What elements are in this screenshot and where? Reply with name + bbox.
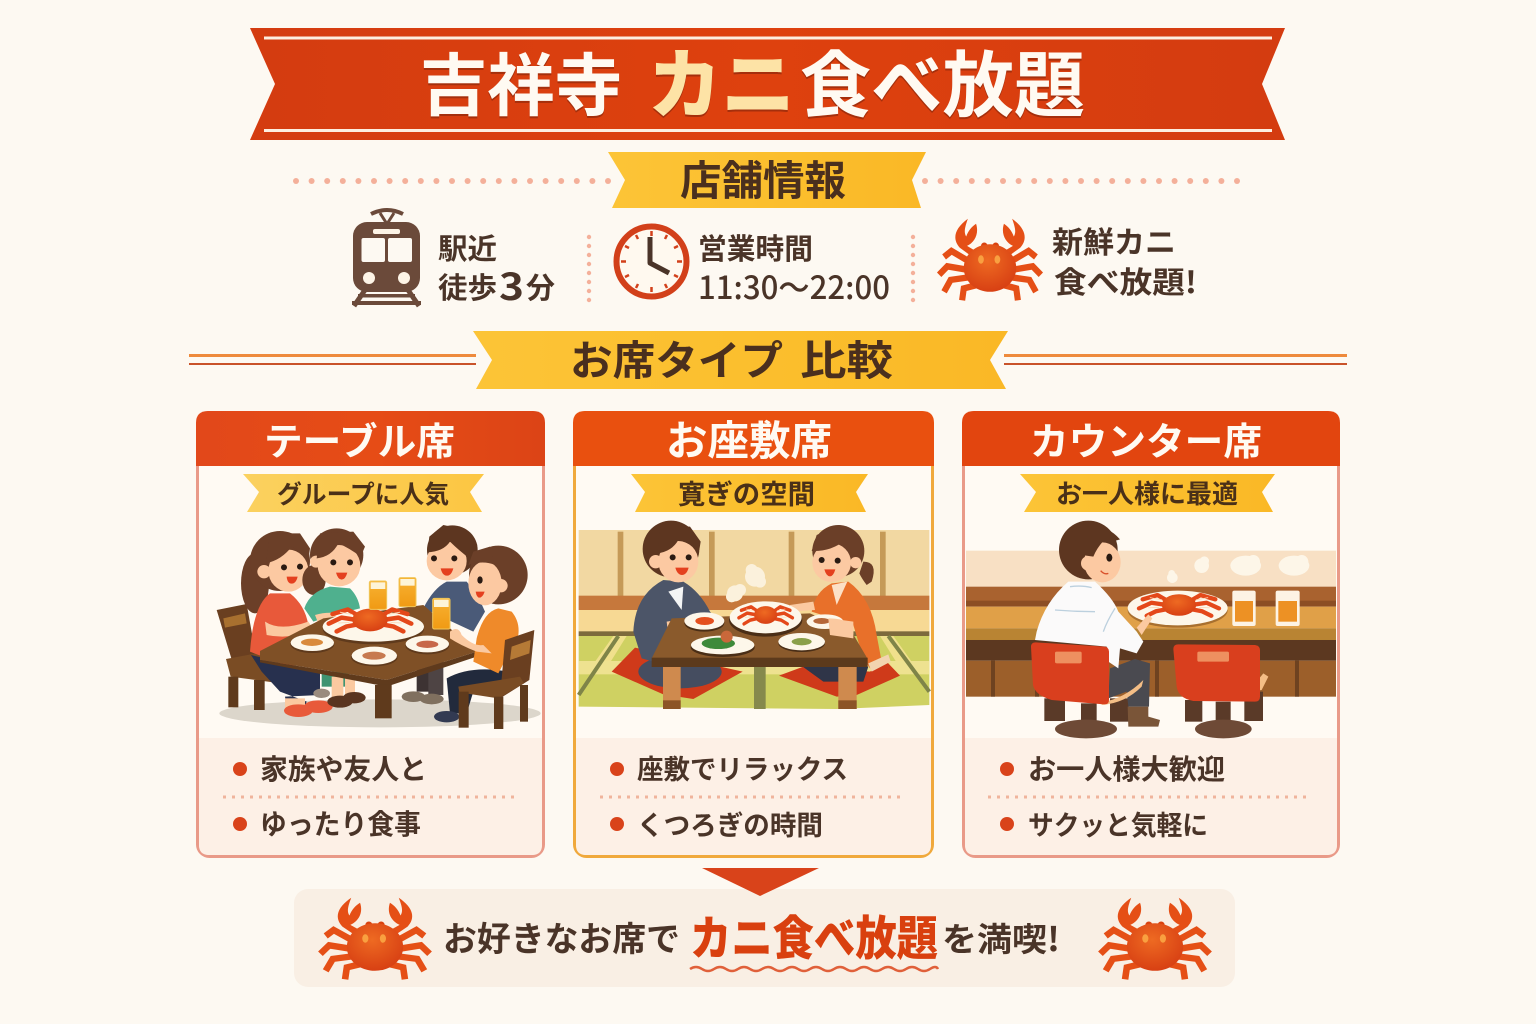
table <box>260 605 477 718</box>
panel: counter seats <box>962 411 1340 856</box>
sub ribbon <box>631 473 868 512</box>
sub ribbon: グループに人気 <box>277 475 449 511</box>
bullet list: サクッと気軽に <box>1028 804 1208 843</box>
card header: お座敷席 <box>666 407 832 467</box>
man in navy <box>402 525 485 704</box>
text: opening hours: 営業時間 <box>698 226 813 268</box>
text: station access: 駅近 <box>438 226 497 268</box>
pedestals <box>1044 692 1263 723</box>
text: station access: 徒歩 <box>438 265 497 307</box>
crab plate <box>1128 591 1228 635</box>
icon: right crab <box>1100 898 1210 979</box>
text: all you can eat crab <box>1052 218 1197 302</box>
bullet list: くつろぎの時間 <box>637 804 823 843</box>
sub ribbon: 寛ぎの空間 <box>678 473 815 512</box>
woman in orange kimono <box>790 525 891 682</box>
man from behind <box>1035 521 1160 727</box>
steam <box>1167 555 1309 583</box>
panel: zashiki seats <box>573 407 934 856</box>
beer glasses <box>1232 591 1300 626</box>
text: all you can eat crab: 新鮮カニ <box>1052 218 1176 262</box>
bullet list: ゆったり食事 <box>260 803 421 843</box>
stool right <box>1173 644 1268 702</box>
bullet list <box>223 748 516 843</box>
seat comparison heading ribbon <box>473 327 1008 389</box>
card header <box>196 411 545 466</box>
text: opening hours: 11:30〜22:00 <box>698 263 890 309</box>
callout text: お好きなお席で <box>443 912 680 961</box>
icon: left crab <box>320 898 430 979</box>
seat comparison heading ribbon: 比較 <box>800 327 893 387</box>
steam <box>726 564 766 602</box>
callout text: を満喫! <box>942 913 1060 961</box>
sub ribbon <box>243 474 484 512</box>
bullet list <box>988 748 1311 843</box>
store info heading ribbon <box>608 147 926 208</box>
icon: train <box>352 210 421 306</box>
right chair <box>458 630 534 729</box>
low table <box>652 601 868 709</box>
person in orange <box>434 546 528 722</box>
down arrow <box>702 868 819 896</box>
title banner: 食べ放題 <box>800 27 1085 132</box>
left cushion <box>612 648 743 699</box>
card header: テーブル席 <box>264 411 455 466</box>
illustration: group at table <box>217 525 541 729</box>
left chair <box>217 604 281 710</box>
text: station access: 3 <box>499 257 524 311</box>
card header <box>573 407 934 467</box>
woman in red <box>241 531 333 717</box>
icon: crab <box>939 219 1041 300</box>
card header: カウンター席 <box>1030 411 1262 466</box>
beer glasses <box>369 578 450 629</box>
store info heading ribbon: 店舗情報 <box>680 147 846 207</box>
bullet list <box>600 748 906 843</box>
icon: clock <box>616 226 686 296</box>
title banner: 吉祥寺 <box>420 31 622 130</box>
woman in teal <box>302 528 366 708</box>
bullet list: 座敷でリラックス <box>637 748 848 787</box>
sub ribbon <box>1020 474 1275 512</box>
text: station access: 分 <box>526 265 555 307</box>
divider <box>587 235 915 302</box>
sub ribbon: お一人様に最適 <box>1056 474 1238 511</box>
right cushion <box>779 662 900 697</box>
seat comparison heading ribbon: お席タイプ <box>570 327 783 387</box>
text: all you can eat crab: 食べ放題! <box>1054 258 1197 302</box>
callout text <box>443 900 1060 969</box>
man in dark kimono <box>633 521 722 688</box>
bullet list: 家族や友人と <box>260 748 427 788</box>
stool left <box>1031 642 1143 705</box>
text: opening hours <box>698 226 890 309</box>
text: station access <box>438 226 555 311</box>
bullet list: お一人様大歓迎 <box>1028 748 1225 788</box>
callout text: カニ食べ放題 <box>690 900 938 969</box>
store info dotted rule <box>293 178 1240 184</box>
wavy underline <box>690 967 938 971</box>
title banner <box>250 24 1285 140</box>
card header <box>962 411 1340 466</box>
panel: table seats <box>196 411 545 856</box>
illustration: counter <box>966 521 1336 738</box>
footer callout panel <box>294 889 1235 987</box>
title banner: カニ <box>648 24 795 134</box>
illustration: tatami room <box>579 521 929 709</box>
seat comparison double rules <box>189 354 1347 365</box>
